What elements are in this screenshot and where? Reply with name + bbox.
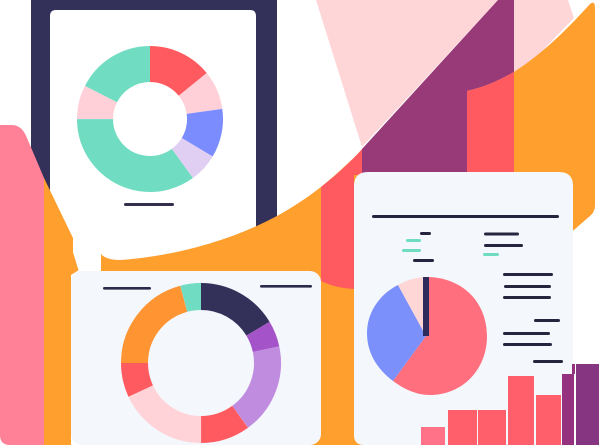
side text lines — [503, 273, 563, 363]
tablet device frame — [31, 0, 277, 270]
top donut caption line — [124, 203, 174, 206]
right panel — [354, 172, 573, 445]
light pink background shapes — [316, 0, 574, 147]
pie chart — [367, 277, 487, 395]
left legend lines — [402, 232, 434, 262]
bar chart — [421, 364, 599, 445]
red column left — [321, 149, 362, 289]
top donut chart — [73, 42, 227, 196]
white gap under tablet — [73, 238, 101, 272]
right legend lines — [483, 232, 523, 256]
bottom panel header lines — [103, 285, 312, 290]
pink left column — [0, 125, 44, 445]
right panel heading line — [372, 215, 559, 218]
red column right — [467, 72, 514, 175]
bottom panel — [71, 271, 321, 445]
bottom donut chart — [108, 270, 294, 447]
purple rising column — [362, 0, 514, 175]
